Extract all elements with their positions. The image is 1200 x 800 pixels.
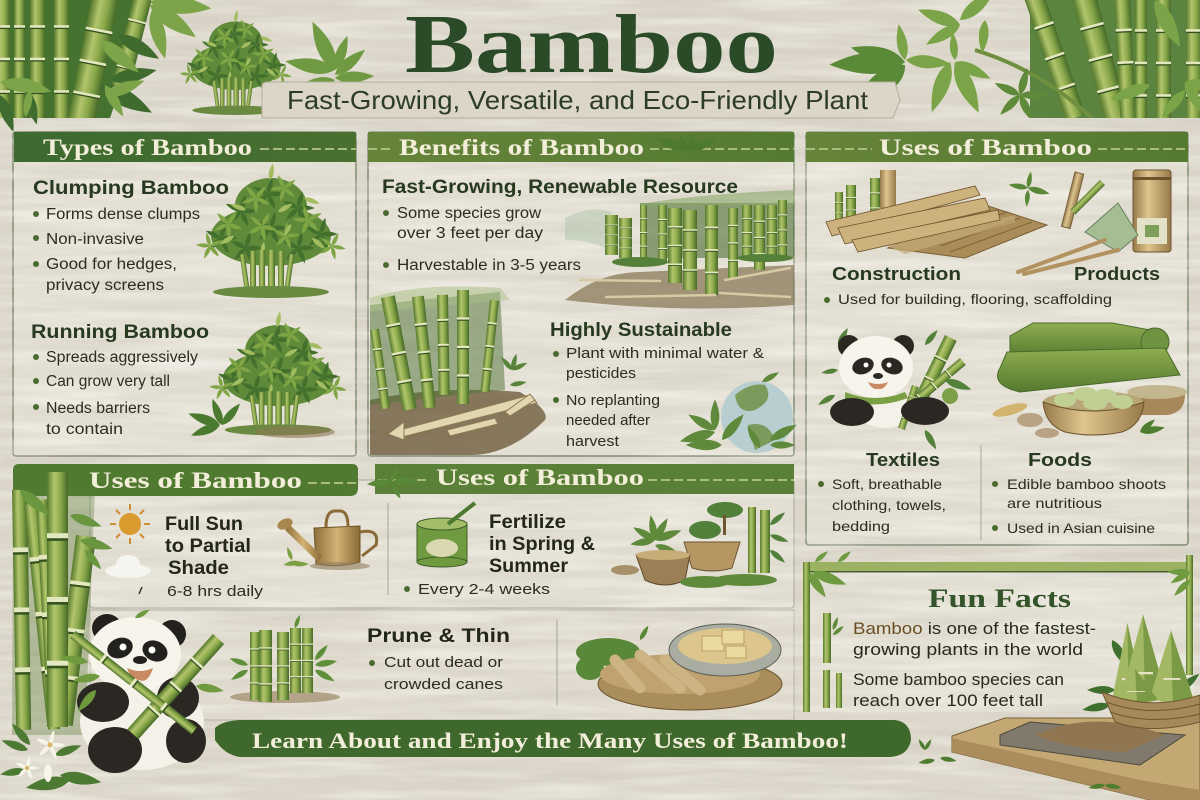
subtitle banner: Fast-Growing, Versatile, and Eco-Friendly Plant [287, 85, 869, 115]
text: fertilize note: Every 2-4 weeks [418, 581, 550, 598]
panel: growing care [90, 480, 794, 608]
list: running: Needs barriers [46, 400, 150, 417]
list: sustainable: needed after [566, 413, 650, 429]
panel: benefits of bamboo [368, 132, 794, 456]
header band: benefits [368, 132, 794, 162]
panel: prune section [90, 610, 794, 720]
text: fact one [853, 619, 1096, 659]
list: textiles: bedding [832, 518, 890, 534]
list: sustainable: harvest [566, 434, 619, 450]
list: clumping: privacy screens [46, 277, 164, 294]
heading: benefits: Benefits of Bamboo [399, 135, 644, 160]
panel: fun facts background [808, 566, 1194, 712]
text: fact one: growing plants in the world [853, 640, 1083, 659]
illustration: white flowers [0, 721, 102, 794]
section: benefits of bamboo [370, 133, 799, 455]
list: foods [992, 476, 1166, 536]
text: fact two: Some bamboo species can [853, 670, 1064, 689]
list: sustainable: No replanting [566, 393, 660, 409]
illustration: tall bamboo left [12, 472, 114, 735]
list: clumping [33, 206, 200, 294]
list: textiles [818, 476, 946, 534]
text: sun [165, 514, 264, 600]
text: fertilize: in Spring & [489, 534, 595, 555]
list: fast-growing [383, 205, 581, 274]
heading: fun facts: Fun Facts [928, 584, 1071, 613]
heading: lower uses middle: Uses of Bamboo [436, 465, 644, 490]
text: prune heading: Prune & Thin [367, 626, 510, 647]
illustration: running bamboo [187, 311, 350, 440]
list: fast-growing: Harvestable in 3-5 years [397, 257, 581, 274]
section: uses of bamboo right [817, 135, 1187, 540]
text: fertilize: Summer [489, 556, 569, 577]
heading: lower uses left: Uses of Bamboo [89, 468, 302, 493]
list: sustainable: Plant with minimal water & [566, 346, 764, 362]
list: prune: crowded canes [384, 676, 503, 693]
icon: sun [110, 504, 150, 544]
header band: uses right [806, 132, 1188, 162]
title: Bamboo [405, 0, 778, 91]
heading: uses right: Uses of Bamboo [879, 135, 1092, 160]
text: fact one: Bamboo is one of the fastest- [853, 619, 1096, 638]
list: running: to contain [46, 421, 123, 438]
label: foods: Foods [1028, 450, 1092, 470]
list: foods: Edible bamboo shoots [1007, 476, 1166, 492]
icon: leaves on banner [367, 466, 417, 500]
section: types of bamboo [31, 135, 350, 440]
text: fact two: reach over 100 feet tall [853, 691, 1043, 710]
illustration: construction materials [826, 170, 1171, 274]
list: running: Can grow very tall [46, 373, 170, 390]
list: running [33, 349, 198, 438]
list: fast-growing: Some species grow [397, 205, 542, 222]
text: sun: 6-8 hrs daily [167, 583, 264, 600]
illustration: bamboo top right [829, 0, 1200, 128]
list: foods: are nutritious [1007, 495, 1102, 511]
heading: types: Types of Bamboo [43, 135, 252, 160]
list: textiles: Soft, breathable [832, 476, 942, 492]
illustration: clumping bamboo [191, 163, 349, 298]
illustration: panda with bamboo [817, 327, 973, 451]
illustration: shrub top [176, 10, 294, 115]
list: sustainable [553, 346, 764, 450]
list: prune [369, 654, 503, 693]
illustration: bamboo grove [565, 190, 794, 309]
banner: call to action: Learn About and Enjoy the Many Uses of Bamboo! [252, 728, 848, 753]
section: lower left care [0, 465, 911, 794]
list: clumping: Non-invasive [46, 231, 144, 248]
list: clumping: Forms dense clumps [46, 206, 200, 223]
text: fertilize: Fertilize [489, 512, 566, 533]
subheading: sustainable: Highly Sustainable [550, 320, 732, 341]
header band: types [14, 132, 356, 162]
subheading: running: Running Bamboo [31, 322, 209, 343]
text: fact two [853, 670, 1064, 710]
text: sun: Full Sun [165, 514, 243, 535]
list: clumping: Good for hedges, [46, 256, 177, 273]
illustration: happy panda [60, 608, 224, 773]
list: running: Spreads aggressively [46, 349, 198, 366]
section: fun facts [803, 549, 1200, 800]
illustration: globe and leaves [678, 370, 799, 453]
list: textiles: clothing, towels, [832, 497, 946, 513]
subheading: clumping: Clumping Bamboo [33, 178, 229, 199]
list: fast-growing: over 3 feet per day [397, 225, 543, 242]
text: sun: Shade [168, 558, 229, 579]
illustration: food basket [576, 624, 782, 710]
illustration: watering can [276, 511, 377, 570]
header band: uses lower left [13, 464, 358, 496]
list: sustainable: pesticides [566, 366, 636, 382]
list: prune: Cut out dead or [384, 654, 503, 671]
illustration: bamboo top left [0, 0, 212, 134]
text: sun: to Partial [165, 536, 251, 557]
icon: small canes [823, 613, 845, 708]
illustration: bamboo cuttings [370, 286, 546, 455]
text: construction note: Used for building, flooring, scaffolding [838, 291, 1112, 307]
subheading: fast-growing: Fast-Growing, Renewable Resource [382, 177, 738, 198]
label: products: Products [1074, 264, 1160, 284]
icon: cloud [105, 555, 151, 594]
frame: bamboo [803, 549, 1193, 712]
label: textiles: Textiles [866, 450, 940, 470]
decorative dashes [260, 149, 1188, 483]
illustration: garden pots [611, 502, 789, 588]
text: fertilize [489, 512, 595, 577]
icon: leaf sprig [655, 133, 718, 155]
panel: types of bamboo [13, 132, 356, 456]
illustration: cane bundle [229, 614, 340, 703]
icon: fertilizer tin [417, 503, 475, 567]
panel: uses of bamboo right [806, 132, 1188, 545]
list: foods: Used in Asian cuisine [1007, 520, 1155, 536]
header band: uses lower middle [375, 464, 794, 494]
illustration: textile rolls and food basket [991, 323, 1187, 438]
illustration: bamboo shoots basket [1082, 614, 1200, 728]
illustration: wooden platform and tray [917, 718, 1200, 800]
banner: call to action [215, 720, 911, 757]
illustration: leaves beside title [284, 19, 374, 91]
label: construction: Construction [832, 264, 961, 284]
